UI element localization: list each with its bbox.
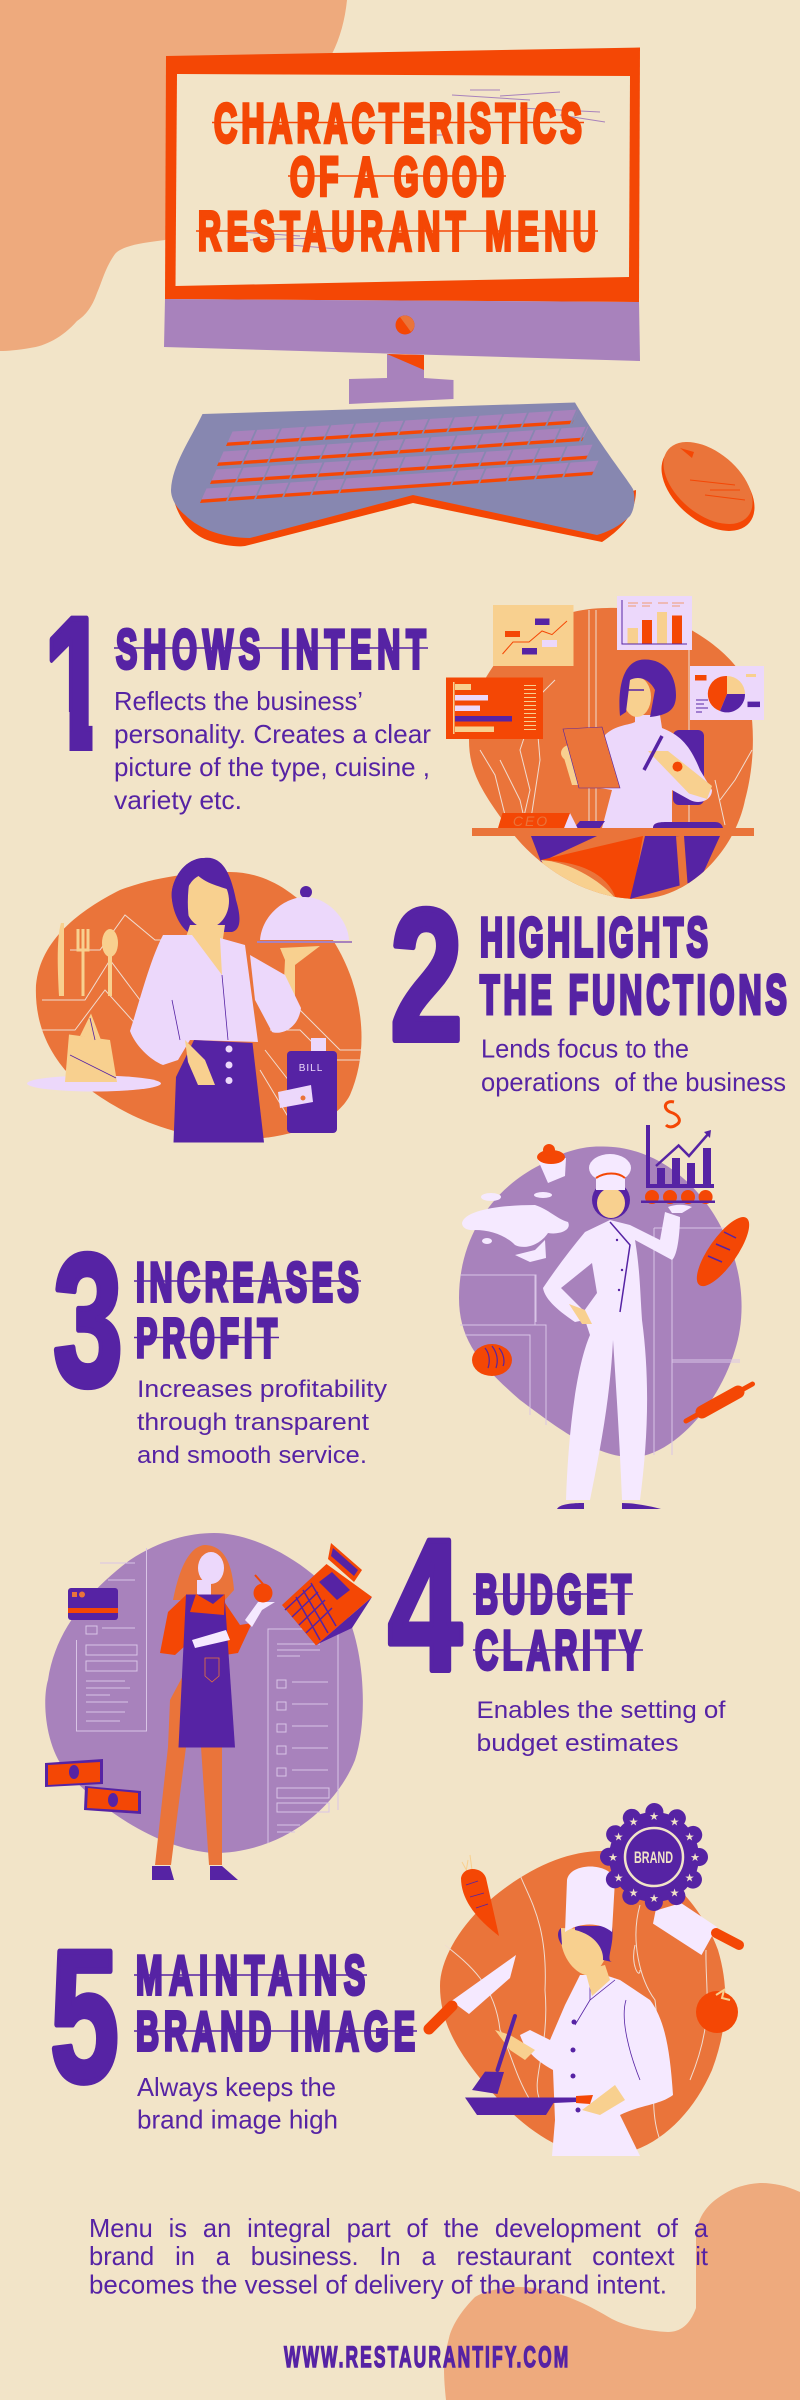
purple backdrop — [45, 1533, 363, 1853]
illustration: CEO at desk — [446, 596, 764, 899]
badge stars: ★ — [614, 1830, 624, 1844]
section 4 body: Enables the setting of — [476, 1697, 726, 1724]
server woman — [152, 1545, 275, 1880]
badge stars: ★ — [629, 1816, 639, 1828]
section 5 body: Always keeps the — [137, 2072, 336, 2102]
bill folder — [278, 1038, 337, 1133]
plate and cake — [27, 1014, 161, 1092]
badge stars: ★ — [649, 1810, 659, 1823]
section 2 number: 2 — [390, 870, 463, 1080]
title: RESTAURANT MENU — [198, 200, 596, 262]
bill folder: BILL — [299, 1063, 323, 1074]
icon: computer mouse — [645, 426, 771, 548]
monitor bezel — [165, 48, 640, 302]
section 1 body: personality. Creates a clear — [114, 719, 431, 749]
section 1 body: Reflects the business’ — [114, 686, 363, 716]
purple backdrop — [459, 1146, 742, 1457]
pattern lines — [42, 915, 362, 1120]
section 5 number: 5 — [50, 1911, 119, 2121]
section 3 heading — [134, 1251, 361, 1369]
chef knife — [429, 1955, 516, 2029]
section 1 heading: SHOWS INTENT — [116, 618, 426, 680]
tomato — [696, 1990, 738, 2033]
waitress — [130, 858, 320, 1142]
section 4 heading: BUDGET — [475, 1563, 631, 1625]
closing paragraph: brand in a business. In a restaurant context it — [89, 2241, 709, 2271]
title: CHARACTERISTICS — [214, 92, 582, 154]
closing paragraph: becomes the vessel of delivery of the brand intent. — [89, 2270, 667, 2300]
section 4 body: budget estimates — [476, 1730, 678, 1757]
monitor screen — [176, 74, 630, 286]
brand badge — [608, 1810, 700, 1905]
orange backdrop — [36, 872, 362, 1140]
section 5 body: brand image high — [137, 2104, 338, 2134]
chart card: horizontal bars — [446, 678, 543, 739]
cupcake — [537, 1144, 566, 1183]
cleaver — [653, 1903, 739, 1955]
section 2 heading: THE FUNCTIONS — [480, 963, 787, 1026]
section 2 body — [481, 1034, 786, 1097]
chart on tray — [641, 1102, 715, 1204]
illustration: chef with rising chart — [459, 1102, 758, 1509]
baguette — [688, 1210, 758, 1293]
keys row 4 — [201, 466, 598, 501]
section 5 heading: BRAND IMAGE — [136, 2000, 415, 2062]
section 1 number: 1 — [44, 578, 108, 788]
chart card: line graph — [493, 605, 574, 666]
section 3 body: through transparent — [137, 1409, 369, 1436]
section 5 heading: MAINTAINS — [136, 1944, 365, 2006]
chair back — [673, 730, 704, 805]
keys row 3 — [211, 450, 592, 482]
keyboard — [171, 402, 636, 546]
brand badge: BRAND — [634, 1848, 673, 1867]
cook — [495, 1866, 673, 2156]
illustration: chef with pan and brand badge — [429, 1810, 739, 2156]
decorative blob: top left — [0, 0, 347, 351]
spatula — [472, 2016, 515, 2094]
title: OF A GOOD — [290, 145, 504, 208]
cash register — [282, 1543, 372, 1646]
section 3 body: and smooth service. — [137, 1442, 367, 1469]
flour spill — [462, 1192, 569, 1262]
kitchen lines — [460, 1228, 740, 1455]
section 5 heading — [134, 1944, 417, 2062]
orange backdrop — [440, 1851, 725, 2156]
section 3 number: 3 — [53, 1215, 123, 1425]
apple — [254, 1575, 272, 1602]
keys row 2 — [218, 432, 586, 464]
section 4 body — [476, 1697, 726, 1757]
seated woman — [561, 659, 712, 828]
section 2 body: operations of the business — [481, 1067, 786, 1097]
seat back top — [574, 821, 723, 828]
CEO name plate: CEO — [513, 813, 549, 829]
desk front and legs — [531, 836, 720, 899]
illustration: server with register — [45, 1533, 372, 1880]
screen texture — [240, 90, 605, 250]
banknotes — [45, 1759, 141, 1814]
section 2 body: Lends focus to the — [481, 1034, 689, 1064]
frying pan — [465, 2095, 593, 2115]
section 3 heading: INCREASES — [136, 1251, 359, 1313]
keys row 1 — [227, 415, 576, 444]
chart card: bars — [617, 596, 692, 650]
badge stars: ★ — [685, 1872, 695, 1884]
decorative blob: bottom right — [444, 2183, 800, 2400]
section 3 body — [137, 1376, 387, 1469]
monitor chin — [164, 299, 640, 361]
badge stars — [608, 1810, 700, 1905]
badge stars: ★ — [670, 1886, 680, 1900]
wood grain — [445, 1875, 707, 2140]
carrot — [461, 1855, 499, 1936]
keyboard underside — [173, 480, 636, 546]
closing paragraph — [89, 2213, 709, 2300]
section 3 body: Increases profitability — [137, 1376, 387, 1403]
cloche — [257, 886, 352, 942]
monitor stand — [349, 354, 454, 404]
credit card icon — [68, 1588, 118, 1620]
badge stars: ★ — [649, 1892, 659, 1905]
badge stars: ★ — [670, 1816, 680, 1828]
section 4 heading — [473, 1563, 643, 1681]
section 5 body — [137, 2072, 338, 2134]
cutlery — [58, 923, 118, 996]
badge stars: ★ — [690, 1851, 700, 1864]
website url: WWW.RESTAURANTIFY.COM — [284, 2341, 568, 2374]
computer monitor with title — [164, 48, 640, 404]
menu sheets — [76, 1548, 338, 1843]
section 1 body: picture of the type, cuisine , — [114, 752, 430, 782]
CEO name plate — [498, 813, 578, 829]
illustration: waitress with cloche — [27, 858, 362, 1142]
section 1 body: variety etc. — [114, 785, 242, 815]
section 2 heading — [480, 906, 787, 1026]
badge stars: ★ — [608, 1851, 618, 1864]
keyboard body — [171, 402, 634, 538]
section 4 number: 4 — [388, 1500, 462, 1710]
section 1 body — [114, 686, 431, 815]
chart card: pie — [690, 666, 764, 720]
section 2 heading: HIGHLIGHTS — [480, 906, 708, 968]
badge stars: ★ — [614, 1872, 624, 1884]
desk top — [472, 828, 754, 836]
section 4 heading: CLARITY — [475, 1619, 641, 1681]
power button — [396, 316, 414, 334]
badge stars: ★ — [685, 1830, 695, 1844]
title — [196, 92, 598, 262]
bread roll — [472, 1344, 512, 1376]
closing paragraph: Menu is an integral part of the development of a — [89, 2213, 709, 2243]
badge stars: ★ — [629, 1886, 639, 1900]
rolling pin — [686, 1384, 752, 1421]
orange backdrop — [469, 608, 753, 899]
chef — [543, 1154, 692, 1509]
section 3 heading: PROFIT — [136, 1307, 277, 1369]
